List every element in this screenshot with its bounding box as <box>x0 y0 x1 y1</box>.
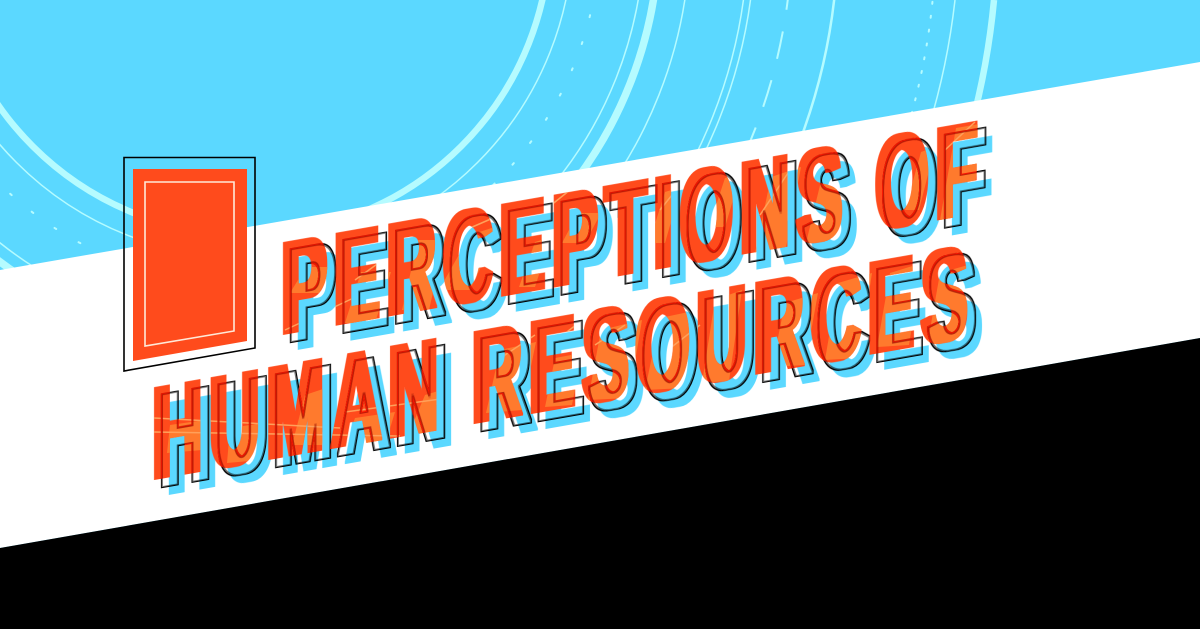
title: Perceptions of Human Resources <box>154 120 992 495</box>
card inner line <box>145 182 234 346</box>
icon: orange framed card <box>124 158 255 371</box>
card outer outline <box>124 158 255 371</box>
light orange wash patches <box>167 123 985 463</box>
light orange texture on the lettering <box>154 122 978 463</box>
pale streak lines <box>154 122 975 436</box>
white diagonal band <box>0 62 1200 548</box>
black diagonal corner <box>0 338 1200 629</box>
card orange fill <box>133 169 247 361</box>
